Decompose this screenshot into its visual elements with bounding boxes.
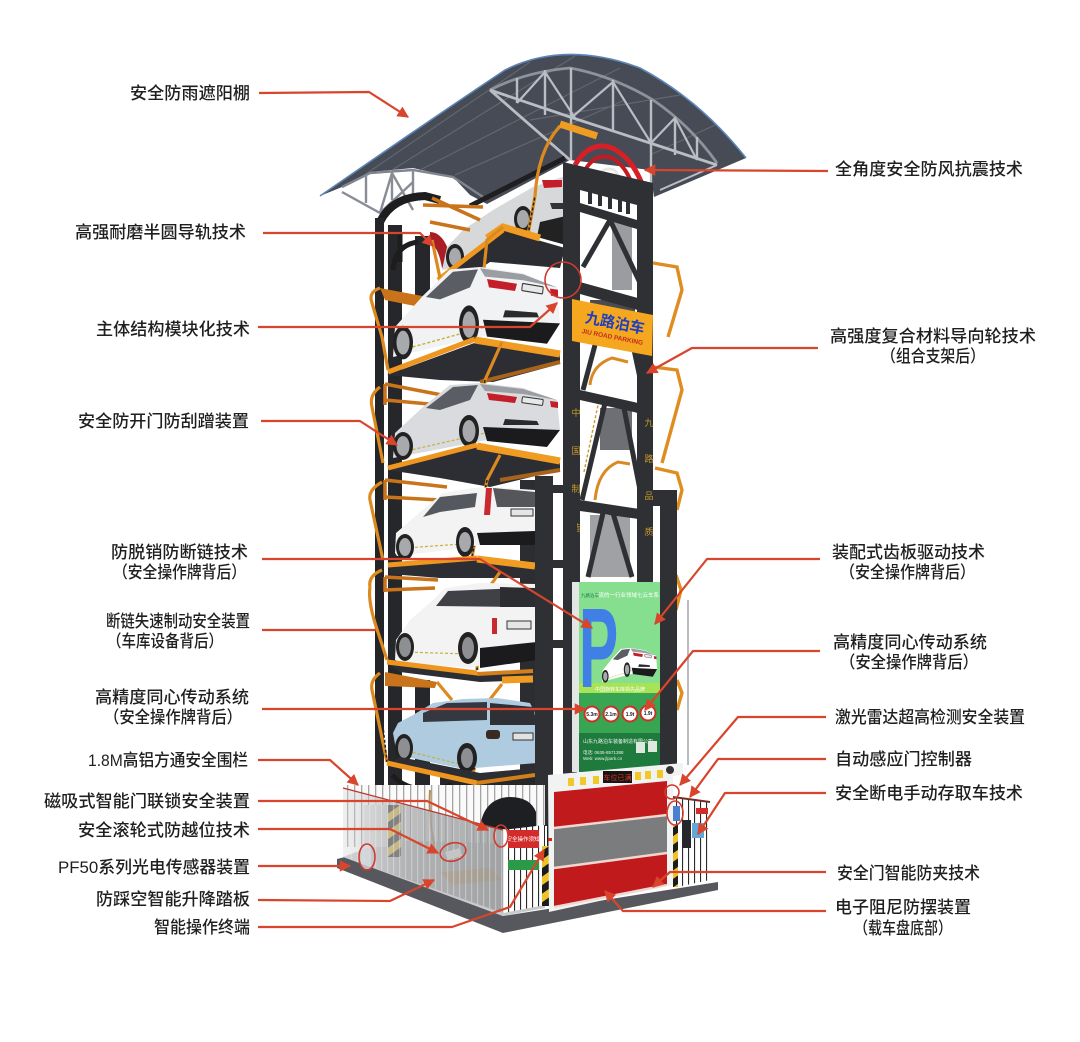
label: PF50系列光电传感器装置: PF50系列光电传感器装置 bbox=[58, 858, 250, 877]
level 4 deck bbox=[370, 558, 535, 670]
label: 高精度同心传动系统 left: （安全操作牌背后） bbox=[104, 707, 242, 727]
brand board bbox=[572, 299, 653, 356]
label: 装配式齿板驱动技术: 装配式齿板驱动技术 bbox=[832, 543, 985, 562]
label: 全角度安全防风抗震技术: 全角度安全防风抗震技术 bbox=[835, 159, 1023, 179]
back fence and floor bbox=[343, 785, 545, 916]
label: 智能操作终端 bbox=[154, 850, 544, 937]
label: 安全门智能防夹技术 bbox=[653, 863, 980, 887]
safety sign board bbox=[572, 582, 660, 772]
label: 防踩空智能升降踏板: 防踩空智能升降踏板 bbox=[96, 890, 250, 909]
tower slogan left: 中国制造: 中 bbox=[571, 407, 581, 418]
roller door gate bbox=[548, 763, 683, 912]
canopy roof bbox=[320, 54, 746, 213]
safety sign board: 九路泊车 bbox=[581, 592, 599, 599]
label: 断链失速制动安全装置 bbox=[106, 611, 376, 651]
safety sign board: 山东九路泊车装备制造有限公司 bbox=[583, 738, 653, 745]
detail ring: PF50 sensor bbox=[359, 844, 375, 870]
right side carriage arms bbox=[653, 263, 682, 710]
tower slogan left: 中国制造: 造 bbox=[571, 522, 581, 533]
label: 装配式齿板驱动技术: （安全操作牌背后） bbox=[840, 562, 975, 582]
label: 断链失速制动安全装置: （车库设备背后） bbox=[107, 632, 223, 651]
label: 高精度同心传动系统 left bbox=[95, 688, 585, 727]
detail ring: door interlock bbox=[494, 825, 508, 847]
detail ring: door controller bbox=[667, 801, 683, 825]
label: 安全滚轮式防越位技术: 安全滚轮式防越位技术 bbox=[78, 820, 250, 840]
label: 安全滚轮式防越位技术 bbox=[78, 820, 438, 853]
tower slogan left: 中国制造: 制 bbox=[571, 483, 581, 494]
front short fence with signs: 安全操作须知 bbox=[506, 835, 540, 843]
label: 高强耐磨半圆导轨技术 bbox=[75, 223, 433, 246]
label: 高精度同心传动系统 left: 高精度同心传动系统 bbox=[95, 688, 249, 707]
detail ring: lidar bbox=[665, 785, 679, 799]
sign limit circles: 1.9t bbox=[644, 711, 653, 717]
sign car bbox=[602, 648, 657, 683]
label: 防脱销防断链技术: 防脱销防断链技术 bbox=[111, 543, 248, 562]
label: 1.8M高铝方通安全围栏: 1.8M高铝方通安全围栏 bbox=[88, 750, 248, 770]
level 3 car bbox=[393, 383, 560, 460]
level 4 car bbox=[395, 487, 535, 560]
roller door gate: 车位已满 bbox=[604, 773, 632, 782]
back guide rail and columns bbox=[375, 196, 540, 810]
tower slogan right: 九路品质: 路 bbox=[644, 453, 654, 464]
detail ring: 主体结构 bbox=[545, 262, 581, 298]
label: 安全防雨遮阳棚 bbox=[130, 83, 408, 117]
label: 防踩空智能升降踏板 bbox=[96, 880, 434, 909]
tower slogan left: 中国制造: 国 bbox=[571, 446, 581, 456]
front short fence with signs bbox=[503, 824, 553, 913]
safety sign board: 中国旋转车库领先品牌 bbox=[595, 686, 645, 693]
label: 高强度复合材料导向轮技术: 高强度复合材料导向轮技术 bbox=[830, 327, 1036, 346]
label: 安全防开门防刮蹭装置 bbox=[78, 411, 397, 445]
label: 高精度同心传动系统 right bbox=[645, 633, 987, 710]
label: 高强度复合材料导向轮技术: （组合支架后） bbox=[881, 347, 985, 366]
tower slogan right: 九路品质: 质 bbox=[644, 526, 654, 537]
label: 智能操作终端: 智能操作终端 bbox=[154, 918, 250, 937]
level 1 car bbox=[442, 158, 566, 270]
sign limit circles: 5.3m bbox=[586, 712, 598, 718]
label: 安全断电手动存取车技术: 安全断电手动存取车技术 bbox=[835, 783, 1023, 803]
label: 1.8M高铝方通安全围栏 bbox=[88, 750, 358, 785]
tower slogan left: 中国制造 bbox=[571, 407, 581, 533]
top orange carriage arm bbox=[423, 124, 597, 240]
sign limit circles bbox=[584, 706, 656, 722]
sign letter P: P bbox=[579, 585, 618, 712]
label: 主体结构模块化技术: 主体结构模块化技术 bbox=[96, 320, 250, 339]
gate warning labels bbox=[568, 770, 663, 786]
label: 高精度同心传动系统 right: 高精度同心传动系统 bbox=[833, 633, 987, 652]
detail ring: roller bbox=[438, 840, 468, 864]
label: 电子阻尼防摆装置: 电子阻尼防摆装置 bbox=[835, 898, 971, 917]
label: 电子阻尼防摆装置 bbox=[605, 891, 971, 938]
label: 高强度复合材料导向轮技术 bbox=[647, 327, 1036, 373]
label: 高强耐磨半圆导轨技术: 高强耐磨半圆导轨技术 bbox=[75, 223, 246, 242]
label: 电子阻尼防摆装置: （载车盘底部） bbox=[854, 919, 952, 938]
roof truss bbox=[342, 68, 717, 213]
label: 安全防雨遮阳棚: 安全防雨遮阳棚 bbox=[130, 83, 250, 103]
label: 磁吸式智能门联锁安全装置: 磁吸式智能门联锁安全装置 bbox=[44, 791, 250, 811]
level 6 deck bbox=[387, 757, 535, 789]
lower tower frame bbox=[535, 476, 689, 826]
safety sign board: 电话: 0635-8571388 bbox=[583, 749, 624, 756]
tower slogan right: 九路品质: 品 bbox=[644, 491, 654, 501]
label: 自动感应门控制器 bbox=[690, 750, 972, 797]
level 1 deck bbox=[371, 227, 565, 370]
label: 防脱销防断链技术: （安全操作牌背后） bbox=[113, 562, 246, 582]
label: 激光雷达超高检测安全装置 bbox=[680, 707, 1025, 785]
label: 防脱销防断链技术 bbox=[111, 543, 592, 628]
right fence bbox=[672, 797, 710, 887]
top red guide ring bbox=[575, 146, 642, 190]
label: 断链失速制动安全装置: 断链失速制动安全装置 bbox=[106, 611, 250, 631]
label: 安全门智能防夹技术: 安全门智能防夹技术 bbox=[837, 863, 980, 883]
level 2 car bbox=[393, 267, 560, 359]
label: 高精度同心传动系统 right: （安全操作牌背后） bbox=[840, 652, 978, 672]
level 2 deck bbox=[371, 339, 560, 463]
tower slogan right: 九路品质 bbox=[644, 418, 654, 537]
sign limit circles: 2.1m bbox=[605, 712, 617, 718]
level 3 deck bbox=[370, 445, 560, 560]
label: 磁吸式智能门联锁安全装置 bbox=[44, 791, 488, 830]
brand board: 九路泊车 bbox=[584, 309, 646, 338]
upper tower frame bbox=[563, 162, 653, 765]
level 5 deck bbox=[372, 662, 535, 780]
base platform bbox=[337, 857, 718, 933]
sign limit circles: 1.9t bbox=[626, 712, 635, 718]
brand board: JIU ROAD PARKING bbox=[581, 328, 644, 347]
label: 自动感应门控制器: 自动感应门控制器 bbox=[835, 750, 972, 769]
label: 激光雷达超高检测安全装置: 激光雷达超高检测安全装置 bbox=[835, 707, 1025, 727]
label: 安全防开门防刮蹭装置: 安全防开门防刮蹭装置 bbox=[78, 411, 249, 431]
label: 安全断电手动存取车技术 bbox=[698, 783, 1023, 834]
tower slogan right: 九路品质: 九 bbox=[644, 418, 654, 428]
level 5 car bbox=[395, 583, 537, 668]
label: 主体结构模块化技术 bbox=[96, 303, 557, 339]
glass fence panel bbox=[343, 788, 503, 913]
safety sign board: Web: www.jlpark.cn bbox=[583, 756, 623, 761]
level 6 car bbox=[393, 698, 537, 773]
safety sign board: 一流的一行业领域七云车系 bbox=[593, 591, 659, 599]
label: 装配式齿板驱动技术 bbox=[655, 543, 985, 624]
